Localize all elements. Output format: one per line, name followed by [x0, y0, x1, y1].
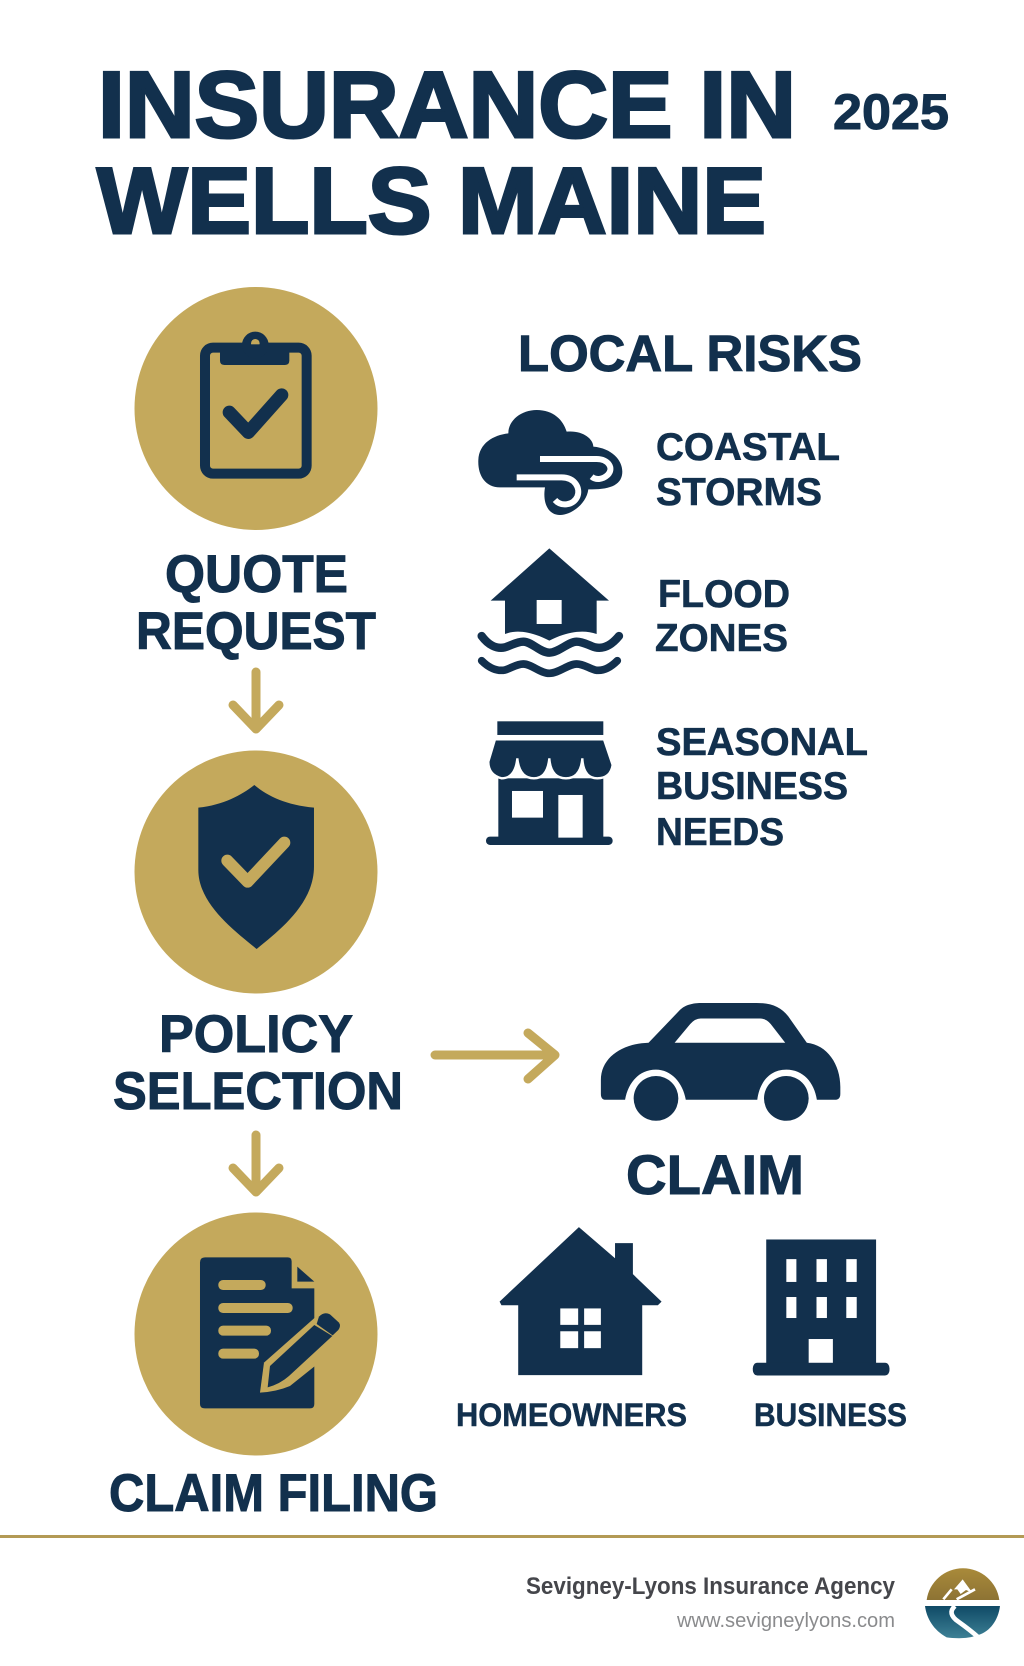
label: seasonal business needs: NEEDS: [656, 811, 784, 854]
step: claim filing: [109, 1212, 438, 1523]
icon: agency logo: [925, 1568, 1000, 1638]
label: coastal storms: [656, 426, 840, 514]
icon: homeowners house: [500, 1227, 662, 1375]
label: business: BUSINESS: [754, 1397, 907, 1433]
icon: storm cloud: [478, 410, 622, 515]
label: policy selection: SELECTION: [113, 1062, 403, 1121]
icon: business building: [753, 1239, 889, 1376]
label: flood zones: [655, 573, 790, 660]
year: 2025: [833, 84, 949, 140]
label: policy selection: [113, 1005, 403, 1121]
label: flood zones: ZONES: [655, 617, 788, 660]
panel: local risks: [478, 325, 868, 854]
title: INSURANCE IN: [98, 52, 796, 157]
step: quote request: [134, 287, 378, 661]
step: policy selection: [113, 750, 403, 1121]
label: seasonal business needs: SEASONAL: [656, 721, 868, 764]
label: seasonal business needs: BUSINESS: [656, 765, 848, 808]
arrow: quote to policy: [233, 672, 279, 729]
label: coastal storms: COASTAL: [656, 426, 840, 469]
panel: claim: [456, 1003, 907, 1433]
footer: agency name: Sevigney-Lyons Insurance Agency: [526, 1573, 896, 1600]
label: quote request: [136, 545, 376, 661]
footer: website: www.sevigneylyons.com: [676, 1610, 895, 1632]
label: quote request: REQUEST: [136, 602, 376, 661]
icon: document and pencil in gold circle: [134, 1212, 378, 1456]
icon: car: [601, 1003, 840, 1121]
label: coastal storms: STORMS: [656, 471, 822, 514]
label: quote request: QUOTE: [165, 545, 348, 604]
label: homeowners: HOMEOWNERS: [456, 1397, 687, 1433]
label: claim filing: CLAIM FILING: [109, 1464, 438, 1523]
title: WELLS MAINE: [97, 148, 766, 253]
arrow: policy to claim: [435, 1033, 555, 1079]
icon: clipboard in gold circle: [134, 287, 378, 530]
label: seasonal business needs: [656, 721, 868, 854]
title: [97, 52, 796, 253]
icon: shield in gold circle: [134, 750, 378, 994]
label: claim: CLAIM: [626, 1143, 804, 1206]
heading: local risks: LOCAL RISKS: [518, 325, 862, 382]
arrow: policy to claim filing: [233, 1135, 279, 1192]
label: flood zones: FLOOD: [658, 573, 790, 616]
icon: storefront: [486, 721, 613, 845]
label: policy selection: POLICY: [159, 1005, 353, 1064]
icon: flooded house: [482, 548, 619, 673]
